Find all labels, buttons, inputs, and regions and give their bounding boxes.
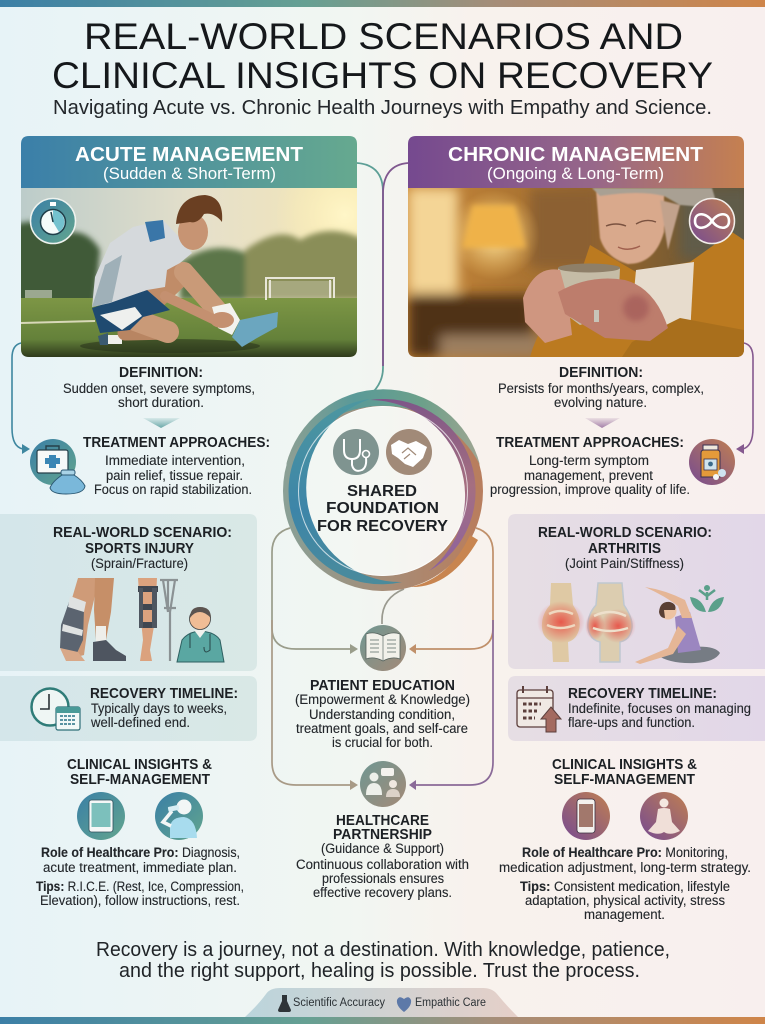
acute definition	[63, 364, 255, 410]
acute recovery timeline text: RECOVERY TIMELINE:	[90, 685, 238, 702]
closing message: and the right support, healing is possible. Trust the process.	[119, 960, 640, 982]
icon: wellness lotus	[690, 585, 724, 612]
title: REAL-WORLD SCENARIOS AND	[84, 16, 683, 57]
chronic recovery timeline text: Indefinite, focuses on managing	[568, 701, 751, 716]
icon: open book	[360, 625, 406, 671]
acute clinical heading	[67, 756, 212, 788]
chronic clinical text: adaptation, physical activity, stress	[525, 893, 725, 908]
shared foundation heading: FOUNDATION	[326, 500, 439, 517]
healthcare partnership text	[296, 812, 469, 900]
icon: heart	[397, 997, 411, 1012]
acute clinical heading: CLINICAL INSIGHTS &	[67, 756, 212, 773]
healthcare partnership text: HEALTHCARE	[336, 812, 429, 829]
patient education text: Understanding condition,	[309, 707, 455, 722]
icon: meditating figure	[640, 792, 688, 840]
chronic clinical heading: CLINICAL INSIGHTS &	[552, 756, 697, 773]
healthcare partnership text: Continuous collaboration with	[296, 857, 469, 872]
panel: arthritis scenario	[508, 514, 765, 669]
label: scientific accuracy: Scientific Accuracy	[293, 997, 385, 1009]
sports injury heading: (Sprain/Fracture)	[91, 556, 188, 571]
footer tab	[245, 988, 518, 1017]
chronic treatment approaches: Long-term symptom	[529, 453, 649, 468]
patient education text: treatment goals, and self-care	[296, 721, 468, 736]
panel: acute management	[21, 136, 357, 357]
sports injury heading: REAL-WORLD SCENARIO:	[53, 524, 232, 541]
chronic treatment approaches: progression, improve quality of life.	[490, 482, 690, 497]
panel: acute recovery timeline	[0, 676, 257, 741]
icon: person drinking water	[155, 792, 203, 840]
connector: acute header to shared foundation	[357, 163, 383, 396]
closing message	[96, 939, 670, 982]
illustration: braced leg and sneaker	[60, 578, 126, 661]
icon: medicine bottle and pills	[689, 439, 735, 485]
icon: smartphone	[562, 792, 610, 840]
arrowheads into lower nodes	[350, 644, 416, 790]
arthritis heading: ARTHRITIS	[588, 540, 661, 557]
acute treatment approaches: pain relief, tissue repair.	[106, 468, 243, 483]
healthcare partnership text: PARTNERSHIP	[333, 826, 432, 843]
illustration: stretching figure	[635, 587, 720, 664]
chronic treatment approaches: TREATMENT APPROACHES:	[496, 434, 684, 451]
acute definition: DEFINITION:	[119, 364, 203, 381]
panel: acute clinical insights	[36, 756, 244, 908]
icon: calendar with up arrow	[517, 686, 561, 732]
title	[52, 16, 713, 96]
chronic recovery timeline text: flare-ups and function.	[568, 715, 695, 730]
illustration: clinician	[177, 607, 224, 662]
soccer goal	[266, 278, 334, 300]
chronic heading: CHRONIC MANAGEMENT	[448, 144, 703, 166]
icon: healthcare partnership	[360, 761, 406, 807]
chronic header band	[408, 136, 744, 188]
acute recovery timeline text: Typically days to weeks,	[91, 701, 227, 716]
acute clinical text: Role of Healthcare Pro: Diagnosis,	[41, 845, 240, 860]
acute recovery timeline text	[90, 685, 238, 730]
healthcare partnership text: professionals ensures	[322, 871, 444, 886]
bottom gradient bar	[0, 1017, 765, 1024]
healthcare partnership text: effective recovery plans.	[313, 885, 452, 900]
chronic definition: evolving nature.	[554, 395, 647, 410]
shared foundation ring	[286, 389, 480, 587]
acute clinical text	[36, 845, 244, 908]
arrow: chronic photo to treatment	[736, 343, 753, 454]
arthritis heading: (Joint Pain/Stiffness)	[565, 556, 684, 571]
shared foundation heading: SHARED	[347, 483, 417, 500]
acute clinical heading: SELF-MANAGEMENT	[70, 771, 210, 788]
infinity icon	[690, 198, 734, 244]
shared foundation heading: FOR RECOVERY	[317, 518, 448, 535]
woman	[523, 188, 744, 357]
chronic clinical text: Tips: Consistent medication, lifestyle	[520, 879, 730, 894]
acute down arrow	[143, 418, 180, 428]
stopwatch icon	[30, 198, 76, 244]
acute photo: injured athlete on field	[21, 188, 357, 357]
chronic definition: DEFINITION:	[559, 364, 643, 381]
panel: sports injury scenario	[0, 514, 257, 671]
patient education text: (Empowerment & Knowledge)	[295, 692, 470, 707]
icon: stethoscope	[333, 429, 379, 475]
sports injury heading: SPORTS INJURY	[85, 540, 194, 557]
healthcare partnership text: (Guidance & Support)	[321, 841, 444, 856]
connectors from shared foundation to lower nodes	[272, 528, 493, 785]
title: CLINICAL INSIGHTS ON RECOVERY	[52, 55, 713, 96]
icon: tablet	[77, 792, 125, 840]
acute treatment approaches	[83, 434, 270, 497]
icon: clock and calendar	[32, 688, 80, 730]
chronic down arrow	[585, 418, 620, 428]
chronic definition: Persists for months/years, complex,	[498, 381, 704, 396]
chronic treatment approaches: management, prevent	[524, 468, 653, 483]
acute clinical text: Tips: R.I.C.E. (Rest, Ice, Compression,	[36, 879, 244, 894]
patient education text: is crucial for both.	[332, 735, 433, 750]
arthritis heading	[538, 524, 712, 571]
sports injury heading	[53, 524, 232, 571]
acute heading: ACUTE MANAGEMENT	[75, 144, 303, 166]
chronic clinical heading	[552, 756, 697, 788]
panel: chronic management	[408, 136, 750, 357]
top gradient bar	[0, 0, 765, 7]
patient education text: PATIENT EDUCATION	[310, 677, 455, 694]
arrow: acute photo to treatment	[12, 343, 30, 454]
acute subheading: (Sudden & Short-Term)	[103, 165, 276, 183]
icon: handshake	[386, 429, 432, 475]
chronic clinical text: management.	[584, 907, 665, 922]
chronic definition	[498, 364, 704, 410]
icon: first aid kit and ice bag	[30, 439, 85, 494]
acute treatment approaches: Focus on rapid stabilization.	[94, 482, 252, 497]
patient education text	[295, 677, 470, 750]
chronic treatment approaches	[490, 434, 690, 497]
icon: flask	[278, 995, 291, 1012]
athlete	[80, 195, 278, 353]
connector: chronic header to shared foundation	[383, 163, 408, 366]
label: empathic care: Empathic Care	[415, 997, 486, 1009]
shared foundation heading	[317, 483, 448, 535]
acute recovery timeline text: well-defined end.	[90, 715, 190, 730]
acute treatment approaches: TREATMENT APPROACHES:	[83, 434, 270, 451]
panel: chronic recovery timeline	[508, 676, 765, 741]
acute header band	[21, 136, 357, 188]
chronic subheading: (Ongoing & Long-Term)	[487, 165, 664, 183]
subtitle: Navigating Acute vs. Chronic Health Journeys with Empathy and Science.	[53, 97, 712, 119]
chronic clinical heading: SELF-MANAGEMENT	[554, 771, 695, 788]
chronic clinical text: medication adjustment, long-term strategy.	[499, 860, 751, 875]
acute clinical text: Elevation), follow instructions, rest.	[40, 893, 240, 908]
arthritis heading: REAL-WORLD SCENARIO:	[538, 524, 712, 541]
chronic clinical text	[499, 845, 751, 922]
chronic photo: older woman holding a cup	[408, 188, 750, 357]
acute clinical text: acute treatment, immediate plan.	[43, 860, 237, 875]
closing message: Recovery is a journey, not a destination. With knowledge, patience,	[96, 939, 670, 961]
acute definition: Sudden onset, severe symptoms,	[63, 381, 255, 396]
chronic recovery timeline text: RECOVERY TIMELINE:	[568, 685, 717, 702]
acute treatment approaches: Immediate intervention,	[105, 453, 245, 468]
chronic clinical text: Role of Healthcare Pro: Monitoring,	[522, 845, 728, 860]
acute definition: short duration.	[118, 395, 204, 410]
illustration: knee brace	[138, 578, 158, 661]
illustration: inflamed knee joints	[537, 583, 636, 662]
illustration: crutch	[160, 580, 178, 661]
panel: chronic clinical insights	[499, 756, 751, 922]
chronic recovery timeline text	[568, 685, 751, 730]
